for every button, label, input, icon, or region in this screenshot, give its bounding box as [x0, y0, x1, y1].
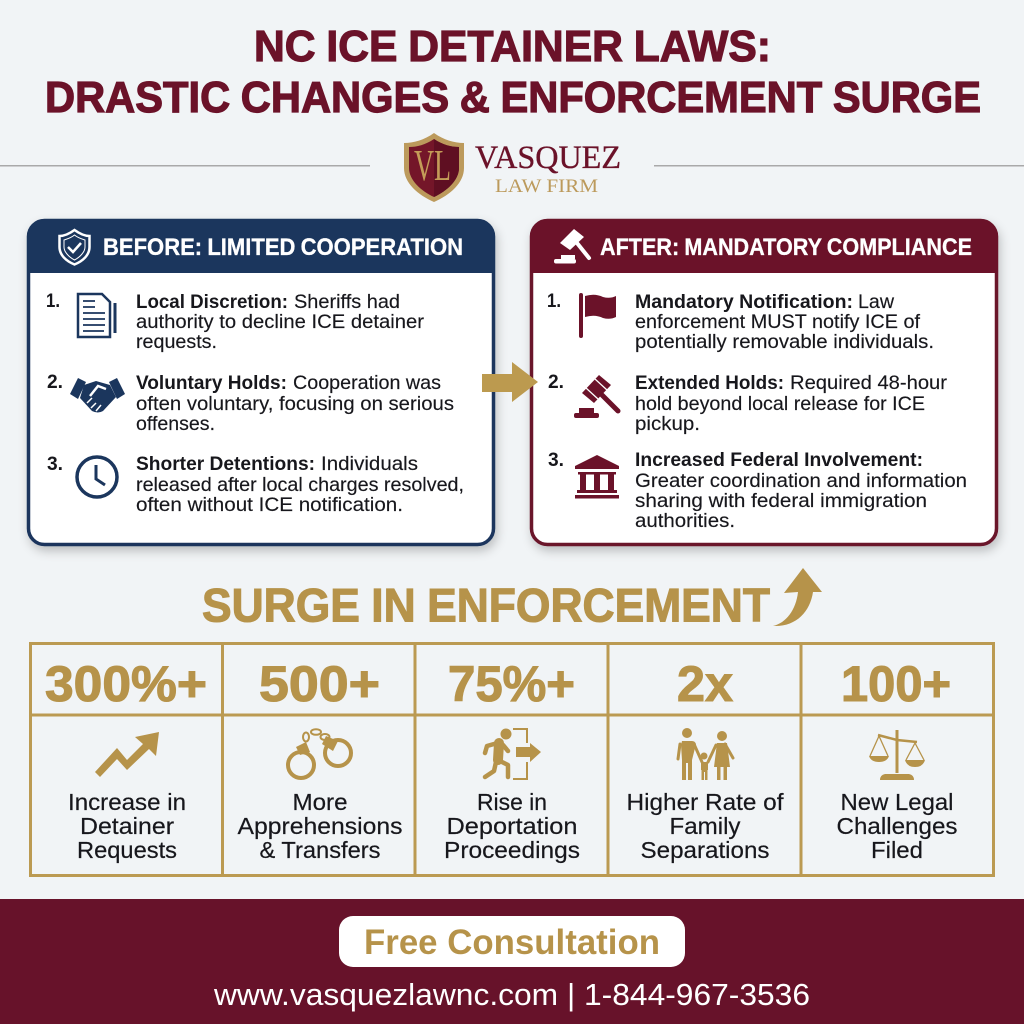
item 1: local discretion: [46, 290, 425, 353]
icon: clock: [77, 457, 117, 497]
stat: 75%+: Rise in: [477, 789, 547, 815]
item 1: local discretion: authority to decline ICE detainer: [136, 311, 425, 333]
item 2: voluntary holds: Voluntary Holds:: [136, 372, 287, 394]
stat: 300%+: Detainer: [80, 813, 174, 839]
item 3: federal involvement: [548, 449, 967, 532]
panel: after: [530, 220, 998, 544]
item 3: shorter detentions: [47, 453, 464, 516]
button: free consultation: Free Consultation: [364, 923, 660, 962]
item 1: local discretion: requests.: [136, 331, 217, 353]
stat: 500+: [238, 656, 402, 863]
icon: courthouse: [575, 455, 619, 498]
stat: 500+: More: [292, 789, 348, 815]
stat: 2x: Higher Rate of: [626, 789, 784, 815]
icon: white gavel: [554, 229, 589, 264]
logo: Vasquez Law Firm: LAW FIRM: [495, 176, 598, 197]
icon: VL shield: VL: [414, 141, 451, 190]
item 1: mandatory notification: Mandatory Notification:: [635, 291, 853, 313]
item 1: mandatory notification: Law: [858, 291, 895, 313]
icon: handshake: [70, 378, 125, 412]
item 2: voluntary holds: offenses.: [136, 413, 215, 435]
stat: 500+: Apprehensions: [238, 813, 402, 839]
title: [45, 22, 981, 122]
arrow: before to after: [482, 362, 538, 402]
icon: curved up arrow: [773, 568, 822, 626]
button: free consultation: [339, 916, 685, 967]
stat: 75%+: 75%+: [448, 656, 575, 712]
footer: [0, 899, 1024, 1024]
item 3: federal involvement: sharing with federal immigration: [635, 490, 927, 512]
stat: 500+: & Transfers: [260, 837, 380, 863]
stat: 100+: Challenges: [836, 813, 958, 839]
icon: flag: [579, 293, 616, 338]
item 1: local discretion: Sheriffs had: [294, 291, 400, 313]
item 2: extended holds: pickup.: [635, 413, 700, 435]
item 2: voluntary holds: often voluntary, focusing on serious: [136, 393, 454, 415]
stat: 75%+: Deportation: [446, 813, 578, 839]
item 2: voluntary holds: Cooperation was: [293, 372, 441, 394]
stat: 2x: Family: [670, 813, 741, 839]
icon: shield check: [60, 230, 90, 264]
stat: 2x: Separations: [640, 837, 770, 863]
icon: scales of justice: [869, 730, 925, 780]
item 1: mandatory notification: 1.: [547, 290, 561, 312]
stat: 300%+: 300%+: [45, 656, 207, 712]
icon: VL shield: [404, 133, 464, 202]
logo: Vasquez Law Firm: VASQUEZ: [475, 140, 621, 176]
item 2: voluntary holds: 2.: [47, 371, 63, 393]
item 3: federal involvement: authorities.: [635, 510, 735, 532]
item 2: extended holds: [548, 371, 948, 435]
item 1: mandatory notification: enforcement MUST notify ICE of: [635, 311, 921, 333]
item 2: extended holds: 2.: [548, 371, 564, 393]
stat: 300%+: Requests: [77, 837, 177, 863]
stat: 100+: [836, 656, 958, 863]
title: DRASTIC CHANGES & ENFORCEMENT SURGE: [45, 73, 981, 122]
title: NC ICE DETAINER LAWS:: [254, 22, 771, 71]
item 2: extended holds: Required 48-hour: [790, 372, 948, 394]
stat: 100+: New Legal: [840, 789, 954, 815]
item 3: shorter detentions: released after local charges resolved,: [136, 474, 464, 496]
stat: 2x: [626, 656, 784, 863]
item 3: shorter detentions: Shorter Detentions:: [136, 453, 315, 475]
item 1: mandatory notification: [547, 290, 934, 353]
panel: before: [27, 220, 495, 544]
before header: [27, 220, 495, 273]
stat: 100+: Filed: [871, 837, 923, 863]
item 3: federal involvement: Greater coordination and information: [635, 470, 967, 492]
item 2: voluntary holds: [47, 371, 454, 435]
item 3: shorter detentions: Individuals: [321, 453, 418, 475]
item 3: federal involvement: Increased Federal Involvement:: [635, 449, 923, 471]
stats grid: [30, 643, 994, 876]
stat: 300%+: [45, 656, 207, 863]
icon: gavel: [574, 375, 618, 418]
stat: 2x: 2x: [677, 656, 733, 712]
item 3: shorter detentions: 3.: [47, 453, 63, 475]
contact line: www.vasquezlawnc.com | 1-844-967-3536: [213, 977, 810, 1012]
item 2: extended holds: Extended Holds:: [635, 372, 784, 394]
stat: 500+: 500+: [259, 656, 380, 712]
stat: 75%+: Proceedings: [444, 837, 580, 863]
before header: BEFORE: LIMITED COOPERATION: [103, 234, 463, 261]
heading: surge in enforcement: SURGE IN ENFORCEMENT: [202, 578, 770, 632]
logo: Vasquez Law Firm: [404, 133, 621, 202]
item 1: local discretion: Local Discretion:: [136, 291, 288, 313]
item 1: local discretion: 1.: [46, 290, 60, 312]
item 2: extended holds: hold beyond local release for ICE: [635, 393, 925, 415]
icon: document: [78, 294, 115, 337]
icon: rising arrow: [95, 732, 159, 777]
stat: 300%+: Increase in: [68, 789, 186, 815]
icon: family: [678, 728, 733, 780]
item 3: shorter detentions: often without ICE notification.: [136, 494, 403, 516]
stat: 100+: 100+: [841, 656, 951, 712]
item 1: mandatory notification: potentially removable individuals.: [635, 331, 934, 353]
stat: 75%+: [444, 656, 580, 863]
item 3: federal involvement: 3.: [548, 449, 564, 471]
after header: AFTER: MANDATORY COMPLIANCE: [600, 234, 972, 261]
icon: person exiting: [485, 728, 541, 779]
after header: [530, 220, 998, 273]
icon: handcuffs: [288, 729, 351, 778]
